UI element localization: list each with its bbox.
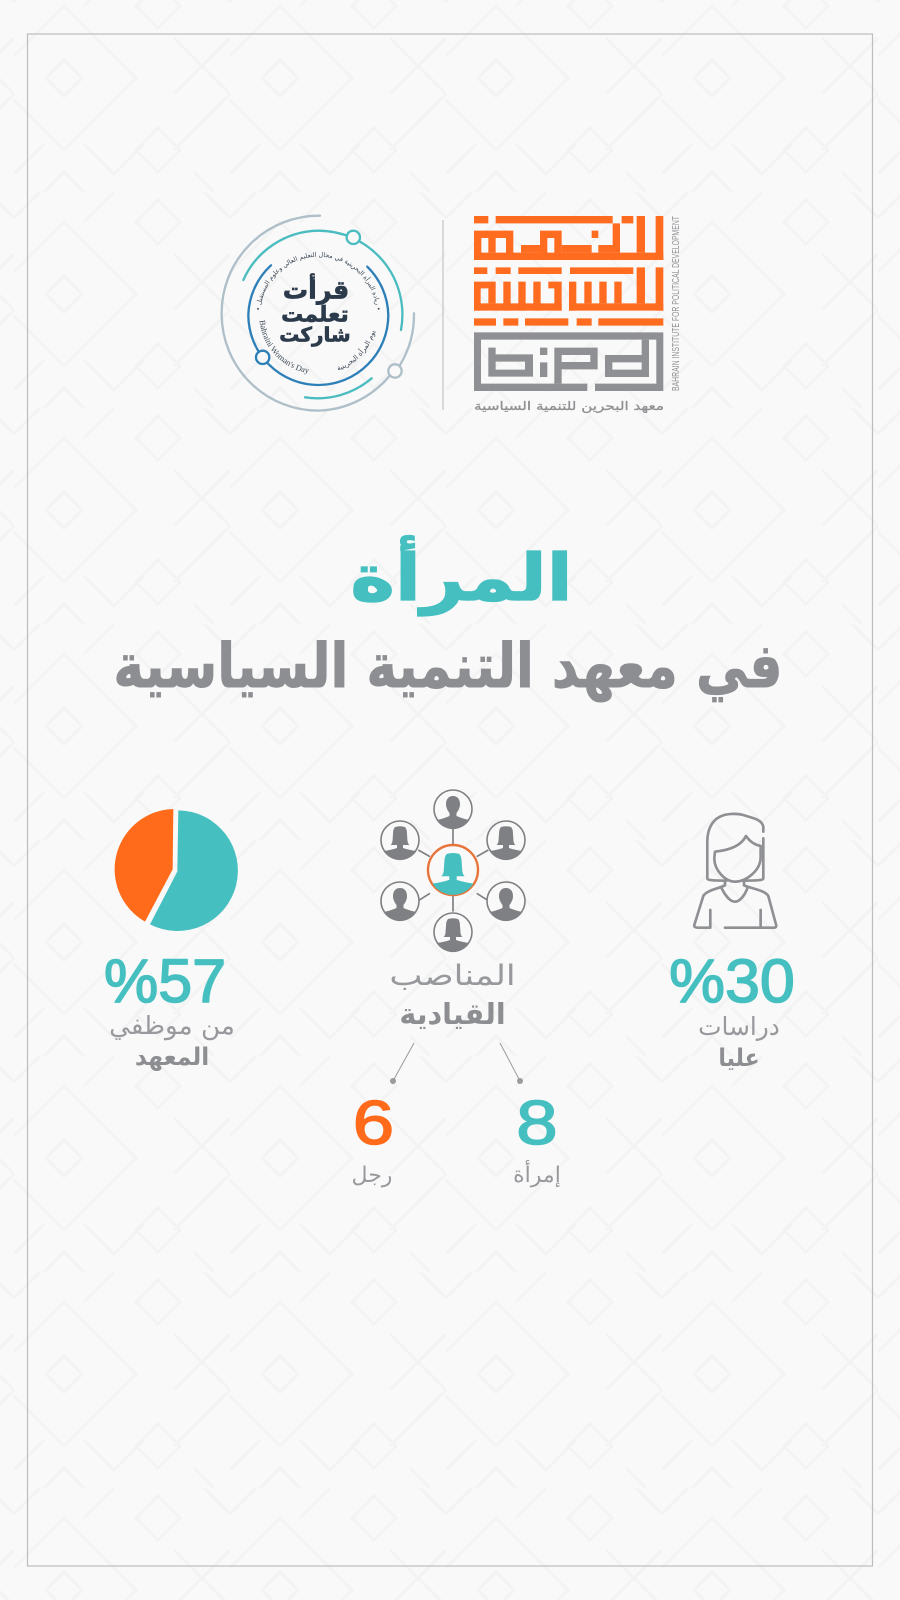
subtitle: في معهد التنمية السياسية (113, 631, 783, 702)
label: من موظفي (109, 1011, 235, 1041)
arrow: to men (390, 1043, 414, 1084)
value: %30 (669, 948, 795, 1016)
icon: network of people (418, 828, 488, 912)
label: عليا (718, 1045, 760, 1072)
value: %57 (104, 947, 226, 1015)
value: women: 8 (516, 1088, 558, 1158)
logo: Bahraini Woman's Day seal (220, 214, 416, 412)
logo: BIPD (474, 216, 682, 414)
seal calligraphy: تعلمت (281, 302, 349, 327)
label: دراسات (698, 1012, 780, 1041)
stat: leadership positions (352, 790, 561, 1188)
label: men: رجل (352, 1163, 392, 1188)
logo divider (442, 220, 444, 410)
label (389, 958, 516, 1031)
seal calligraphy: شاركت (279, 322, 351, 346)
stat: 57% of institute staff (104, 809, 238, 1071)
label: women: إمرأة (513, 1160, 561, 1188)
pie chart (115, 809, 238, 931)
seal calligraphy: قرأت (283, 274, 349, 306)
label: المناصب (389, 958, 516, 992)
kufic mark orange (474, 216, 663, 326)
seal ring text: يوم المرأة البحرينية (338, 331, 376, 370)
arrow: to women (500, 1043, 523, 1084)
title: المرأة (350, 536, 573, 616)
seal ring text: Bahraini Woman's Day (260, 320, 310, 374)
label (698, 1012, 780, 1072)
logo Arabic name: معهد البحرين للتنمية السياسية (474, 399, 664, 414)
label: المعهد (135, 1043, 209, 1071)
value: men: 6 (353, 1088, 394, 1158)
label (109, 1011, 235, 1071)
kufic mark gray (474, 332, 663, 391)
icon: woman outline (694, 814, 776, 928)
stat: 30% postgraduate (669, 814, 795, 1072)
seal ring text (256, 252, 380, 374)
seal calligraphy (279, 274, 351, 346)
logo vertical English name: BAHRAIN INSTITUTE FOR POLITICAL DEVELOPMENT (671, 216, 682, 391)
label: القيادية (399, 997, 506, 1031)
seal ring text: • ريادة المرأة البحرينية في مجال التعليم العالي وعلوم المستقبل • (256, 252, 380, 310)
